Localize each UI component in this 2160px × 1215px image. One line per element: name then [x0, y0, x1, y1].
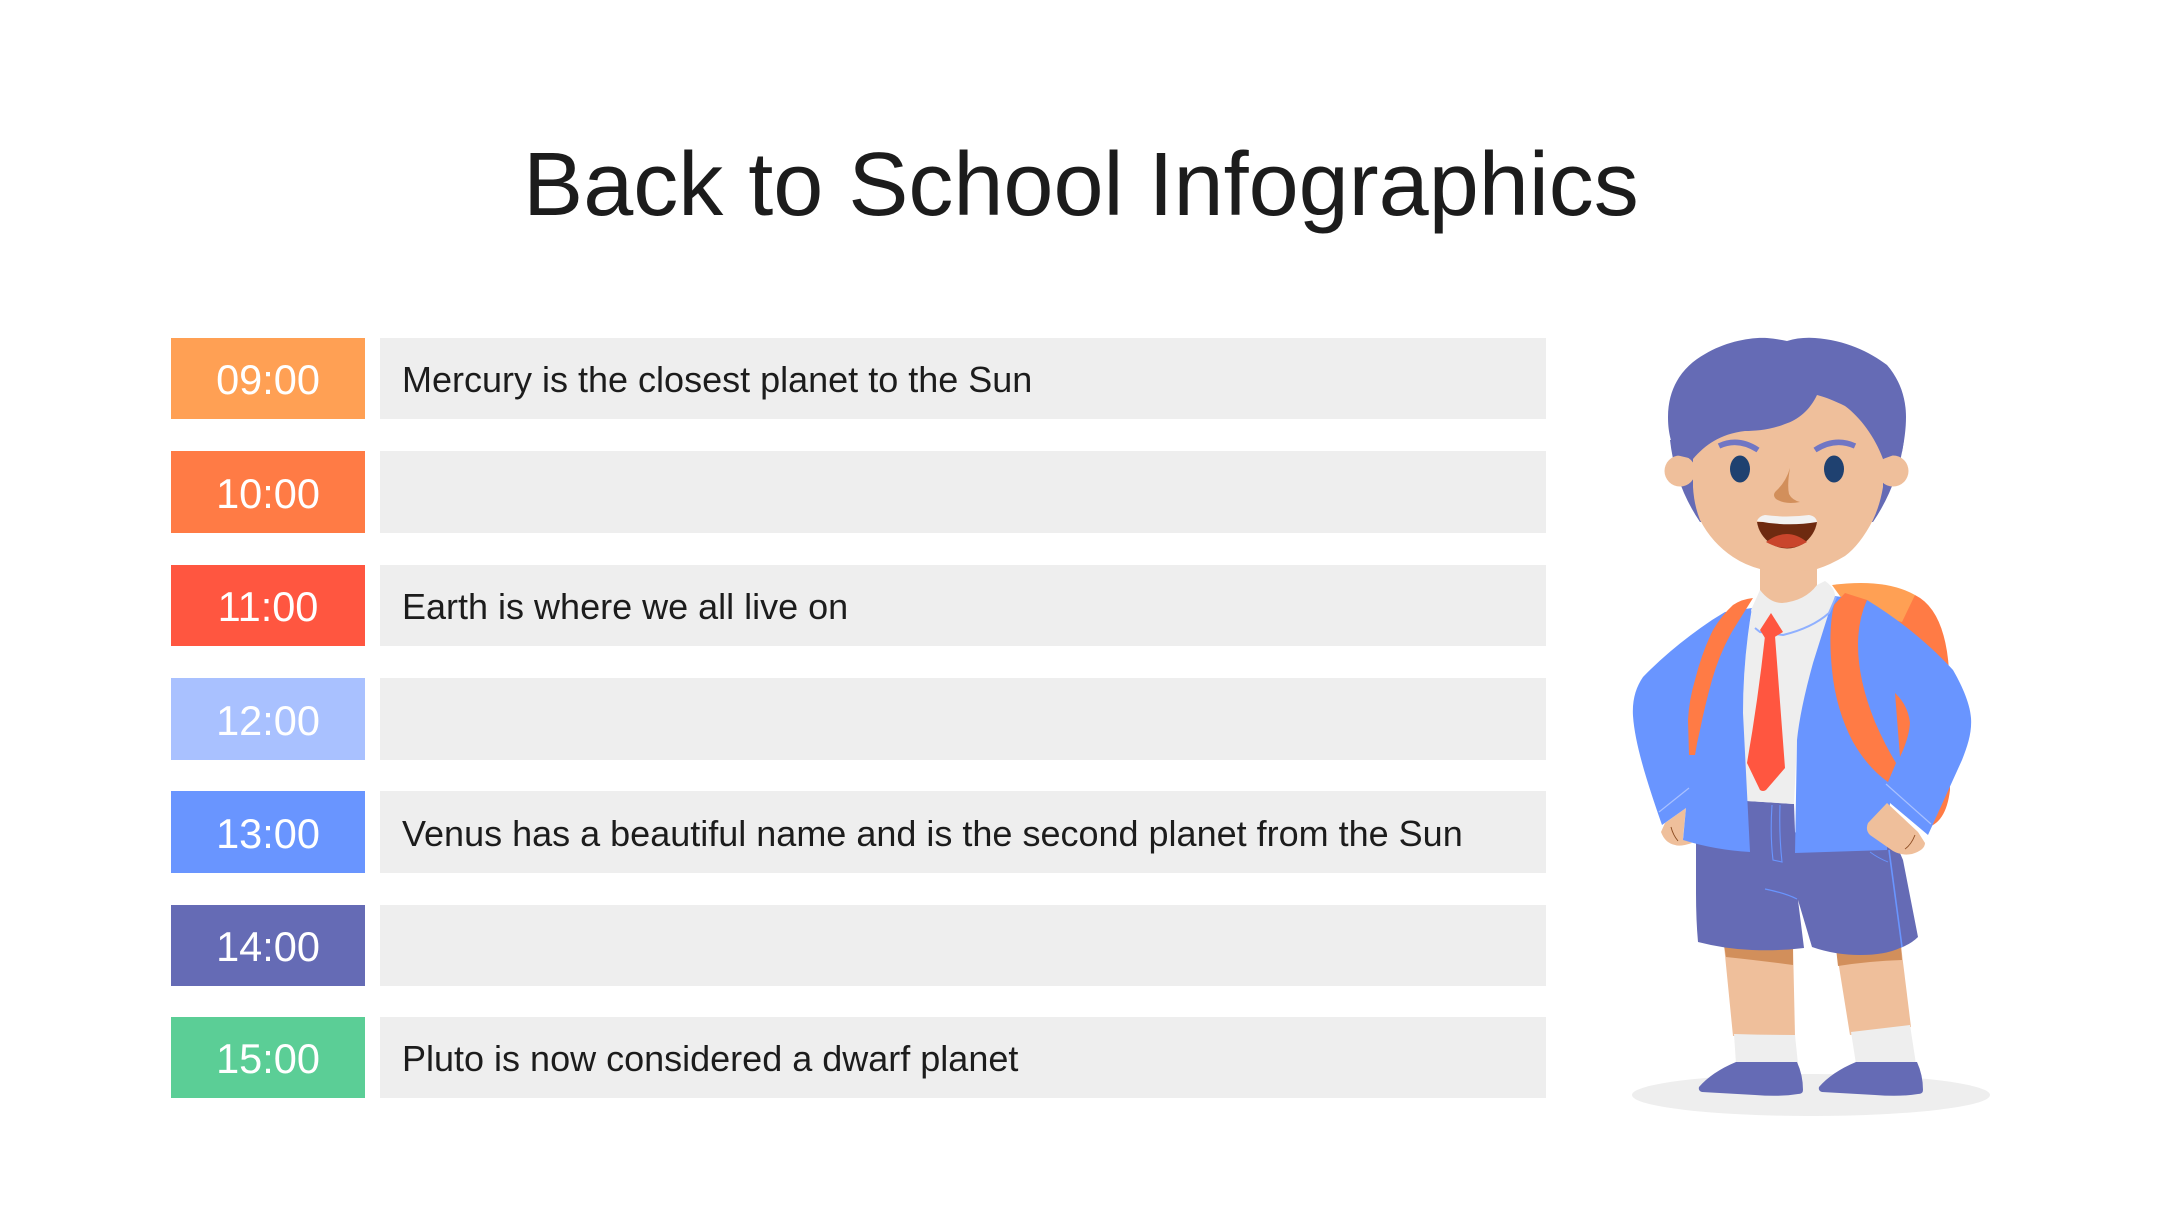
nose	[1774, 468, 1800, 503]
legs	[1724, 945, 1911, 1036]
schedule row 15:00	[171, 1017, 1546, 1098]
eyebrows	[1719, 442, 1855, 450]
schedule row 11:00	[171, 565, 1546, 646]
schedule row 10:00: 10:00	[216, 470, 320, 516]
tie	[1747, 613, 1785, 791]
title: Back to School Infographics	[523, 135, 1639, 235]
back hair	[1670, 440, 1904, 522]
collar	[1751, 581, 1836, 635]
schedule row 13:00: Venus has a beautiful name and is the second planet from the Sun	[402, 812, 1463, 854]
jacket seams	[1659, 784, 1931, 824]
schedule row 09:00: 09:00	[216, 356, 320, 403]
backpack straps	[1688, 593, 1910, 782]
right hand	[1867, 803, 1925, 855]
schedule row 11:00: 11:00	[218, 583, 318, 630]
face	[1693, 390, 1883, 572]
waist and fly	[1747, 801, 1796, 862]
schedule row 10:00	[171, 451, 1546, 533]
backpack	[1832, 583, 1950, 828]
schedule row 12:00: 12:00	[216, 696, 320, 744]
schedule row 14:00	[171, 905, 1546, 986]
shoes	[1699, 1062, 1923, 1096]
schedule row 13:00: 13:00	[216, 810, 320, 856]
mouth	[1757, 515, 1817, 548]
ground shadow	[1632, 1074, 1990, 1116]
hair	[1668, 338, 1906, 459]
schedule row 09:00: Mercury is the closest planet to the Sun	[402, 359, 1032, 400]
schedule row 15:00: Pluto is now considered a dwarf planet	[402, 1038, 1018, 1079]
left hand	[1661, 808, 1692, 846]
schedule row 09:00	[171, 338, 1546, 419]
schedule row 13:00	[171, 791, 1546, 873]
socks	[1734, 1025, 1916, 1064]
schedule row 14:00: 14:00	[216, 923, 320, 970]
jacket	[1633, 596, 1971, 853]
shorts	[1696, 830, 1918, 955]
neck	[1760, 555, 1817, 610]
ears	[1664, 456, 1908, 486]
schedule row 11:00: Earth is where we all live on	[402, 586, 848, 627]
schedule row 12:00	[171, 678, 1546, 760]
schedule row 15:00: 15:00	[216, 1035, 320, 1082]
shirt	[1743, 610, 1830, 804]
eyes	[1730, 456, 1844, 482]
